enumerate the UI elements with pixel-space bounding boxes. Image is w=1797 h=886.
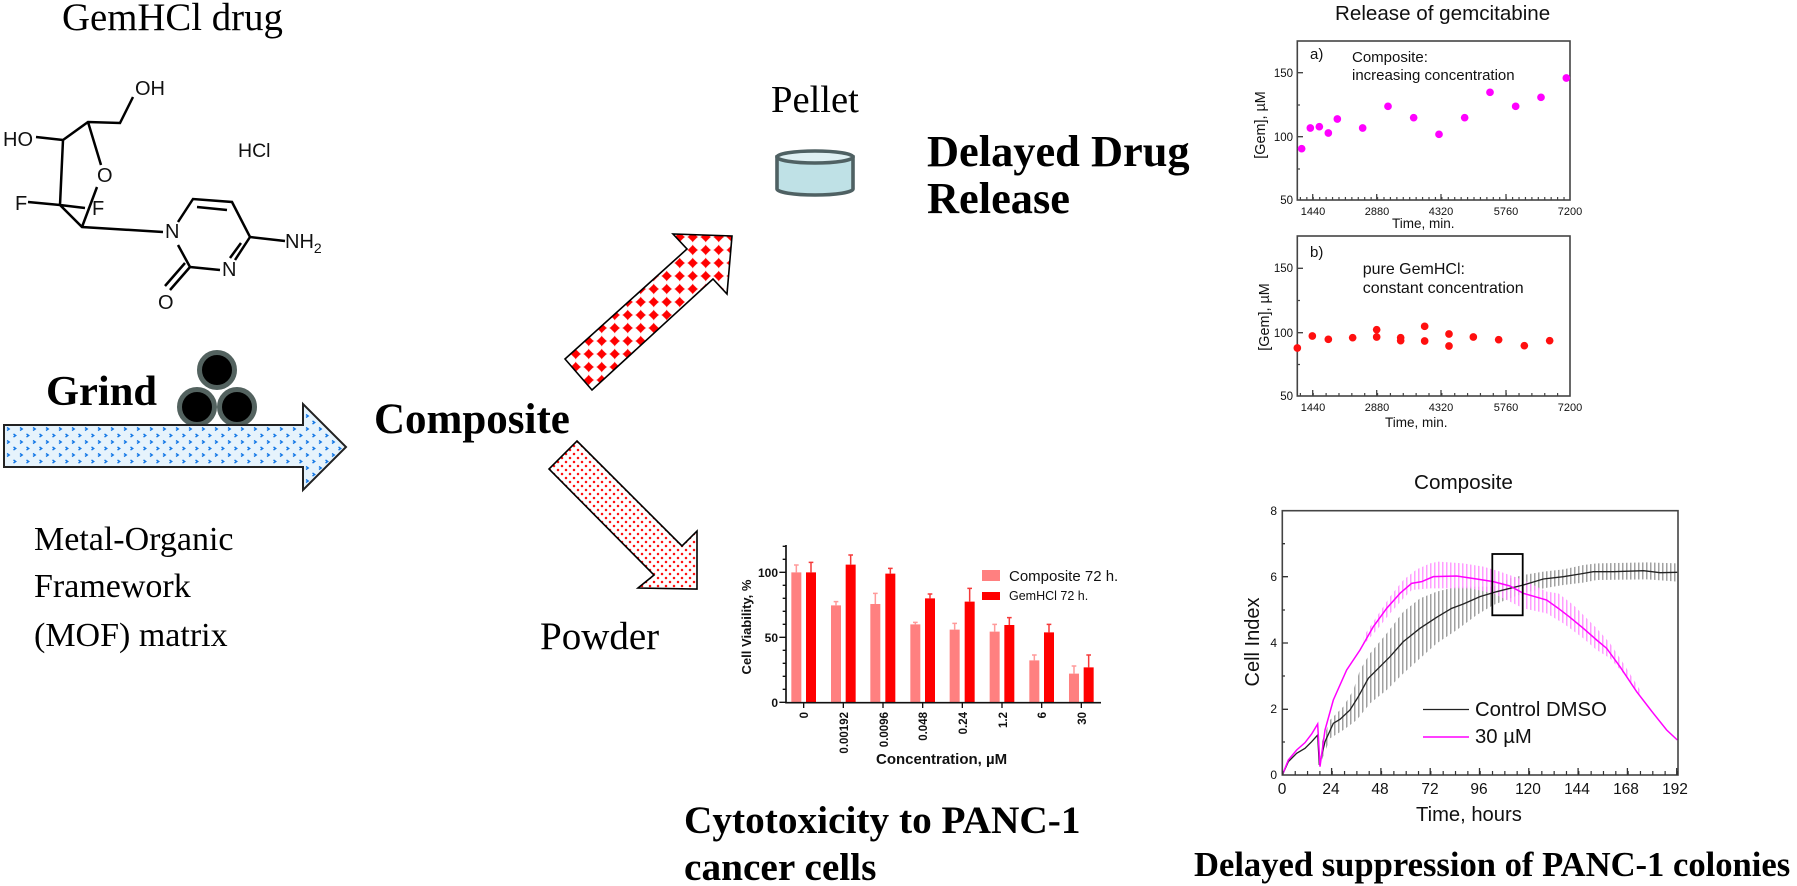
molecule: gemcitabine hydrochloride structure: NH (285, 231, 314, 253)
y tick labels: 50 (1280, 195, 1293, 207)
label: Pellet: Pellet (771, 79, 859, 121)
x tick labels: 48 (1371, 781, 1389, 798)
molecule: gemcitabine hydrochloride structure: F (92, 198, 104, 220)
x tick labels: 7200 (1558, 206, 1582, 218)
molecule: gemcitabine hydrochloride structure: HCl (238, 140, 270, 162)
y tick labels: 150 (1274, 263, 1293, 275)
x tick labels: 192 (1662, 781, 1688, 798)
panel: release of gemcitabine chart b (1257, 236, 1582, 430)
annotation pure GemHCl: pure GemHCl: (1363, 261, 1465, 278)
text block: Metal-Organic Framework matrix: Framework (34, 568, 191, 605)
molecule: gemcitabine hydrochloride structure: HO (3, 129, 33, 151)
x tick labels: 7200 (1558, 402, 1582, 414)
x tick labels: 4320 (1429, 402, 1453, 414)
y tick labels: 2 (1270, 702, 1277, 716)
molecule: gemcitabine hydrochloride structure: OH (135, 78, 165, 100)
plot frame (1282, 511, 1678, 775)
x tick labels: 96 (1470, 781, 1488, 798)
x tick labels: 2880 (1365, 402, 1389, 414)
y axis title: Cell Index (1242, 598, 1264, 686)
chart title: Composite (1414, 471, 1513, 494)
error band 30 uM (1363, 562, 1640, 695)
heading: Cytotoxicity to PANC-1 cancer cells: Cytotoxicity to PANC-1 (684, 798, 1080, 842)
axis ticks (1297, 73, 1570, 200)
y tick labels (1270, 504, 1277, 782)
x tick labels: 0.24 (958, 711, 970, 734)
x tick labels: 5760 (1494, 402, 1518, 414)
bars composite (791, 565, 1079, 702)
molecule: gemcitabine hydrochloride structure: 2 (314, 240, 322, 256)
x axis title: Time, min. (1385, 415, 1448, 430)
annotation composite: Composite: (1352, 49, 1428, 66)
data points magenta (1298, 74, 1570, 152)
x tick labels: 0.048 (918, 711, 930, 741)
y axis title: Cell Viability, % (739, 579, 754, 674)
panel: cell index chart (1242, 471, 1688, 826)
molecule: gemcitabine hydrochloride structure: N (222, 259, 236, 281)
arrow: grinding blue patterned (4, 404, 346, 490)
error band control (1320, 562, 1677, 765)
heading: Cytotoxicity to PANC-1 cancer cells (684, 798, 1080, 886)
y axis title: [Gem], µM (1253, 91, 1269, 159)
molecule: gemcitabine hydrochloride structure: O (158, 292, 174, 314)
text block: Metal-Organic Framework matrix (34, 521, 234, 654)
x tick labels: 0.0096 (879, 712, 891, 747)
panel: release of gemcitabine chart a (1253, 2, 1582, 231)
y tick labels: 4 (1270, 636, 1277, 650)
y tick labels (758, 566, 778, 710)
x tick labels: 1.2 (998, 712, 1010, 728)
heading: Composite: Composite (374, 396, 570, 443)
legend: GemHCl 72 h. (1009, 589, 1088, 603)
x tick labels: 5760 (1494, 206, 1518, 218)
y tick labels: 50 (765, 631, 778, 645)
annotation pure GemHCl (1363, 261, 1524, 297)
plot frame (1297, 41, 1570, 200)
y tick labels: 100 (758, 566, 778, 580)
x tick labels (1301, 206, 1582, 218)
x tick labels (799, 711, 1089, 754)
text block: Metal-Organic Framework matrix: Metal-Organic (34, 521, 234, 558)
y tick labels: 8 (1270, 504, 1277, 518)
heading: Delayed Drug Release (927, 126, 1190, 223)
highlight box (1492, 554, 1523, 615)
x axis title: Time, min. (1392, 216, 1455, 231)
x tick labels: 1440 (1301, 402, 1325, 414)
x tick labels: 168 (1613, 781, 1639, 798)
heading: Delayed Drug Release: Delayed Drug (927, 126, 1190, 176)
molecule: gemcitabine hydrochloride structure: O (97, 165, 113, 187)
y tick labels (1274, 263, 1293, 403)
annotation composite: increasing concentration (1352, 67, 1515, 84)
y tick labels: 150 (1274, 68, 1293, 80)
x tick labels: 120 (1515, 781, 1541, 798)
molecule: gemcitabine hydrochloride structure: F (15, 193, 27, 215)
curve: control DMSO (1282, 571, 1677, 775)
label: Powder: Powder (540, 615, 659, 658)
y tick labels: 0 (1270, 768, 1277, 782)
annotation b: b) (1310, 244, 1323, 261)
icon: pellet cylinder (777, 151, 853, 195)
arrow: checkered red to pellet (565, 234, 732, 390)
legend: 30 µM (1475, 726, 1532, 748)
text block: Metal-Organic Framework matrix: (MOF) matrix (34, 617, 228, 654)
legend (982, 568, 1118, 603)
data points red (1293, 322, 1553, 352)
x tick labels: 72 (1421, 781, 1439, 798)
annotation pure GemHCl: constant concentration (1363, 280, 1524, 297)
heading: Delayed suppression of PANC-1 colonies: Delayed suppression of PANC-1 colonies (1194, 846, 1790, 884)
y tick labels: 100 (1274, 328, 1293, 340)
legend (1423, 699, 1607, 748)
panel: cell viability bar chart (739, 545, 1118, 768)
annotation composite (1352, 49, 1515, 84)
molecule: gemcitabine hydrochloride structure: N (165, 221, 179, 243)
y tick labels: 100 (1274, 132, 1293, 144)
molecule: gemcitabine hydrochloride structure (3, 78, 322, 314)
x tick labels: 144 (1564, 781, 1590, 798)
curve: 30 uM (1282, 576, 1677, 775)
heading: Delayed Drug Release: Release (927, 173, 1070, 223)
x tick labels: 24 (1322, 781, 1340, 798)
x tick labels: 30 (1077, 712, 1089, 725)
axis ticks (1297, 268, 1570, 396)
y tick labels: 0 (771, 696, 778, 710)
x tick labels: 1440 (1301, 206, 1325, 218)
x tick labels: 4320 (1429, 206, 1453, 218)
chart title: Release of gemcitabine (1335, 2, 1550, 25)
y tick labels (1274, 68, 1293, 207)
annotation a: a) (1310, 46, 1323, 63)
bars GemHCl (806, 555, 1094, 702)
legend: Composite 72 h. (1009, 568, 1118, 585)
heading: Grind: Grind (46, 368, 157, 415)
x tick labels: 0.00192 (839, 712, 851, 754)
x tick labels: 2880 (1365, 206, 1389, 218)
axis ticks (1282, 544, 1678, 775)
y tick labels: 6 (1270, 570, 1277, 584)
x tick labels: 0 (799, 712, 811, 718)
arrow: dotted red to powder (549, 441, 697, 589)
x axis title: Time, hours (1416, 804, 1522, 826)
axes (779, 545, 1101, 708)
x tick labels (1278, 781, 1688, 798)
x axis title: Concentration, µM (876, 751, 1007, 768)
legend: Control DMSO (1475, 699, 1607, 721)
x tick labels: 6 (1037, 712, 1049, 718)
y tick labels: 50 (1280, 391, 1293, 403)
x tick labels: 0 (1278, 781, 1287, 798)
x tick labels (1301, 402, 1582, 414)
plot frame (1297, 236, 1570, 396)
y axis title: [Gem], µM (1257, 283, 1273, 351)
icon: three grinding balls (180, 352, 254, 424)
